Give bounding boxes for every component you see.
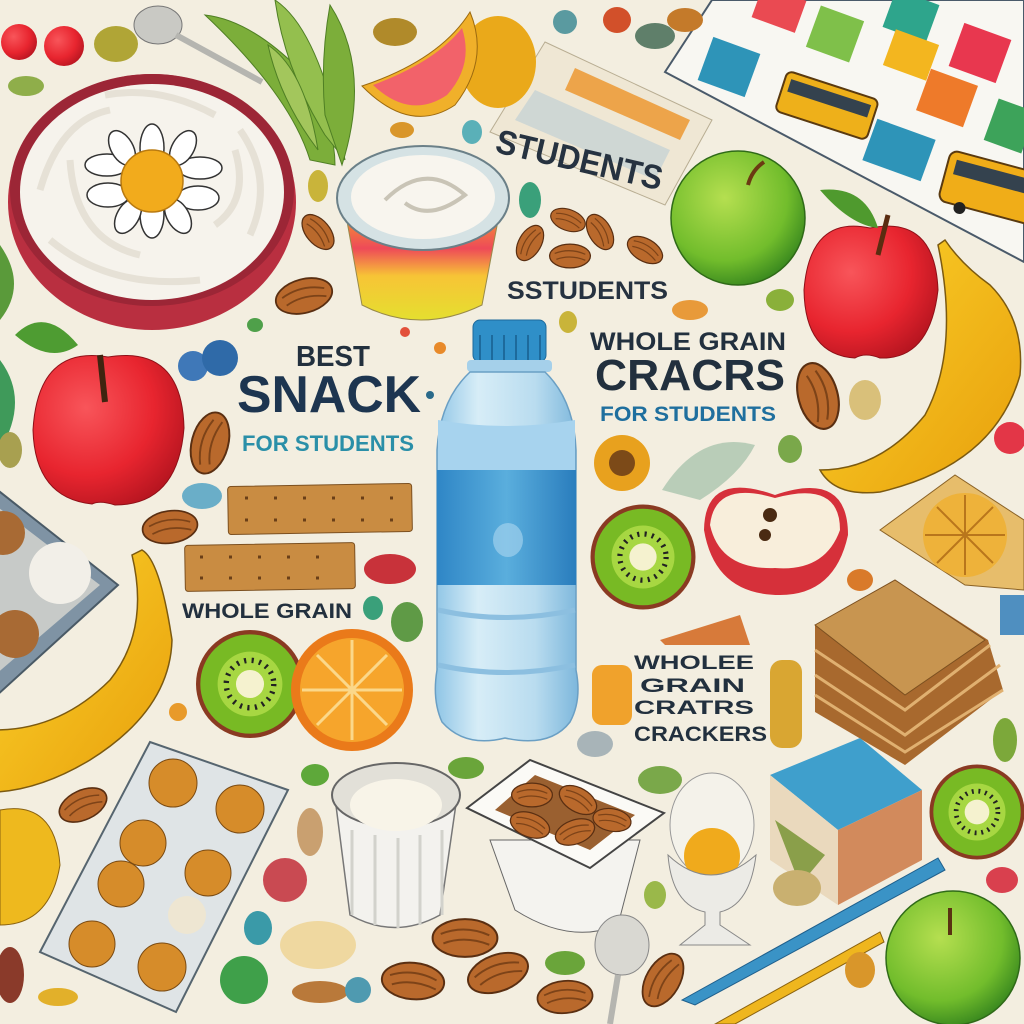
- heading: best snack for students: FOR STUDENTS: [242, 431, 414, 456]
- icon: nut tray: [467, 760, 664, 932]
- icon: bowl of yogurt with flower: [8, 74, 296, 330]
- heading: best snack for students: BEST: [296, 341, 370, 373]
- icon: cracker bar upper: [228, 483, 412, 535]
- icon: snack box: [770, 738, 922, 905]
- heading: whole grain crackers: [634, 653, 767, 746]
- icon: cream cup: [332, 763, 460, 928]
- icon: blister pack of biscuits: [40, 742, 288, 1012]
- icon: pile of nuts: [511, 204, 667, 269]
- icon: almond: [140, 507, 200, 547]
- icon: banana right: [820, 240, 1021, 493]
- icon: red bean: [364, 554, 416, 584]
- heading: students angled: STUDENTS: [492, 123, 666, 198]
- icon: blueberries and green leaf: [15, 322, 238, 381]
- icon: small fruits top left: [1, 24, 138, 96]
- heading: whole grain: WHOLE GRAIN: [182, 600, 352, 623]
- icon: yellow pencil: [715, 932, 884, 1024]
- icon: kiwi right: [590, 504, 696, 610]
- icon: water bottle: [435, 320, 578, 741]
- icon: almond beside banana: [790, 358, 846, 434]
- bottle label: [437, 470, 576, 585]
- icon: almond near apple: [184, 408, 236, 478]
- icon: red apple left: [33, 355, 184, 505]
- icon: calendar tiles: [698, 0, 1024, 181]
- heading: whole grain crackers: WHOLEE: [634, 653, 754, 674]
- newspaper strip: [490, 42, 712, 205]
- icon: green leaves: [205, 0, 354, 165]
- icon: yogurt cup: [337, 146, 509, 320]
- icon: bottom nuts: [54, 209, 692, 1015]
- icon: banana left: [0, 550, 172, 792]
- icon: blue pen: [682, 858, 945, 1005]
- icon: egg tray: [0, 488, 118, 697]
- heading: whole grain cracrs: [590, 328, 786, 426]
- heading: whole grain cracrs: CRACRS: [595, 351, 785, 400]
- heading: best snack for students: [237, 341, 421, 456]
- icon: kiwi far right: [930, 764, 1024, 860]
- icon: egg in cup: [668, 773, 756, 945]
- icon: kiwi and orange: [196, 629, 413, 751]
- icon: green apple: [671, 151, 805, 285]
- heading: whole grain cracrs: WHOLE GRAIN: [590, 328, 786, 356]
- icon: flower fruit and wrap: [594, 435, 755, 500]
- icon: apple half: [704, 488, 848, 595]
- icon: green apple bottom: [886, 891, 1020, 1024]
- icon: cracker stack: [815, 580, 1003, 765]
- heading: best snack for students: SNACK: [237, 366, 421, 424]
- icon: yellow pepper: [0, 809, 60, 925]
- heading: whole grain crackers: CRATRS: [634, 698, 754, 719]
- icon: strawberry: [994, 422, 1024, 454]
- heading: whole grain cracrs: FOR STUDENTS: [600, 403, 776, 426]
- icon: grapefruit slice and lemon: [362, 12, 536, 116]
- flower: [85, 124, 222, 238]
- heading: whole grain crackers: CRACKERS: [634, 723, 767, 746]
- icon: orange crackers plate: [880, 475, 1024, 590]
- icon: school bus right: [936, 150, 1024, 234]
- icon: bottom spoon: [595, 915, 649, 1024]
- icon: school bus top: [775, 71, 879, 140]
- heading: whole grain crackers: GRAIN: [640, 676, 745, 697]
- icon: spoon: [134, 6, 262, 82]
- heading: sstudents: SSTUDENTS: [507, 277, 668, 305]
- icon: schedule board: [665, 0, 1024, 262]
- icon: snack colored pieces: [592, 615, 802, 748]
- icon: red apple right: [804, 189, 938, 358]
- icon: cracker bar lower: [185, 543, 355, 591]
